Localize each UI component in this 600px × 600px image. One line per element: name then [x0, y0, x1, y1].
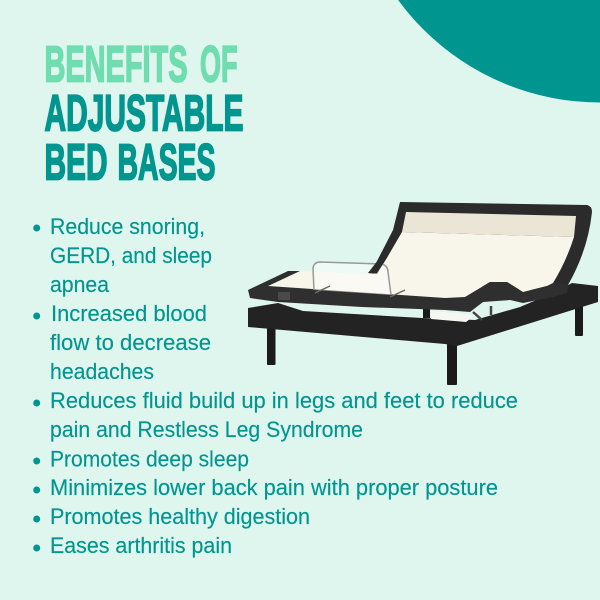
title: BED — [44, 134, 108, 190]
logo tag — [278, 292, 290, 300]
title: OF — [200, 36, 238, 92]
bullet: fluid build up — [33, 388, 518, 442]
backrest upper panel — [402, 212, 576, 237]
bullet: blood flow — [33, 301, 211, 384]
bullet: reduce snoring: Reduce snoring, — [50, 214, 205, 239]
backrest wedge — [368, 255, 388, 273]
bullet: reduce snoring — [33, 214, 212, 297]
corner circle — [350, 0, 600, 102]
bullet: fluid build up: pain and Restless Leg Syndrome — [50, 417, 363, 442]
bed illustration — [248, 202, 598, 385]
title — [44, 36, 244, 190]
side rail — [313, 262, 391, 295]
benefits list — [33, 214, 518, 558]
bullet: lower back: Minimizes lower back pain with proper posture — [50, 475, 498, 500]
bullet: blood flow: flow to decrease — [50, 330, 211, 355]
seat frame — [248, 271, 568, 312]
bullet: blood flow: headaches — [50, 359, 154, 384]
bullet: reduce snoring: apnea — [50, 272, 110, 297]
backrest and seat cream panel — [268, 232, 574, 298]
bullet: digestion: Promotes healthy digestion — [50, 504, 310, 529]
bullet: reduce snoring: GERD, and sleep — [50, 243, 212, 268]
title: BENEFITS — [44, 36, 188, 92]
bed base frame — [248, 283, 598, 346]
rail clips — [315, 286, 405, 297]
bullet: deep sleep: Promotes deep sleep — [50, 446, 249, 472]
bullet: fluid build up: Reduces fluid build up in legs and feet to reduce — [50, 388, 518, 413]
bullet: arthritis: Eases arthritis pain — [50, 533, 232, 558]
centre support — [423, 305, 430, 318]
title: ADJUSTABLE — [44, 84, 244, 142]
backrest frame — [368, 202, 592, 292]
title: BASES — [118, 134, 216, 190]
bed legs — [267, 305, 583, 385]
bullet: blood flow: Increased blood — [51, 301, 207, 326]
